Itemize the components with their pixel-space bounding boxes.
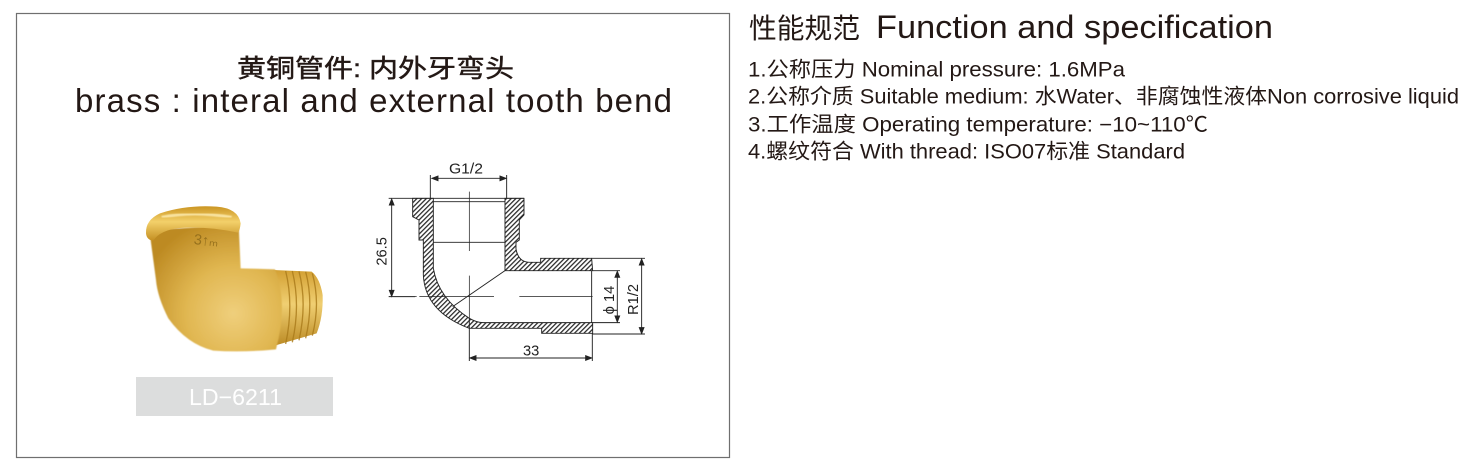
panel: product	[16, 14, 730, 458]
R1/2 dimension: R1/2	[626, 284, 642, 315]
photo: brass elbow fitting	[146, 206, 323, 351]
cast marking: 3↑ₘ	[193, 232, 219, 251]
title: English: brass : interal and external tooth bend	[75, 82, 672, 119]
spec 1: 1.公称压力 Nominal pressure: 1.6MPa	[748, 58, 1125, 82]
R1/2 dimension	[592, 258, 645, 334]
33 dimension: 33	[523, 344, 539, 360]
phi 14 dimension: ϕ 14	[602, 286, 618, 314]
spec 3: 3.工作温度 Operating temperature: −10~110℃	[748, 114, 1208, 136]
title: Chinese: 黄铜管件: 内外牙弯头	[237, 55, 514, 83]
hatched walls	[413, 198, 593, 333]
rim	[146, 206, 241, 241]
heading: function and specification: Function and specification	[876, 9, 1273, 45]
model label: LD−6211	[189, 384, 282, 410]
26.5 dimension	[375, 198, 415, 297]
thread	[273, 270, 323, 346]
phi 14 dimension	[593, 271, 620, 323]
body	[151, 225, 282, 351]
G1/2 dimension	[430, 161, 507, 198]
inner lines	[413, 198, 592, 328]
spec 4: 4.螺纹符合 With thread: ISO07标准 Standard	[748, 140, 1185, 164]
33 dimension	[469, 328, 592, 361]
26.5 dimension: 26.5	[375, 237, 391, 266]
heading: function and specification: 性能规范	[749, 13, 860, 44]
technical drawing: elbow section	[375, 161, 645, 361]
model label	[136, 377, 333, 416]
spec list	[748, 58, 1459, 164]
G1/2 dimension: G1/2	[449, 161, 483, 177]
spec 2: 2.公称介质 Suitable medium: 水Water、非腐蚀性液体Non corrosive liquid	[748, 86, 1459, 108]
